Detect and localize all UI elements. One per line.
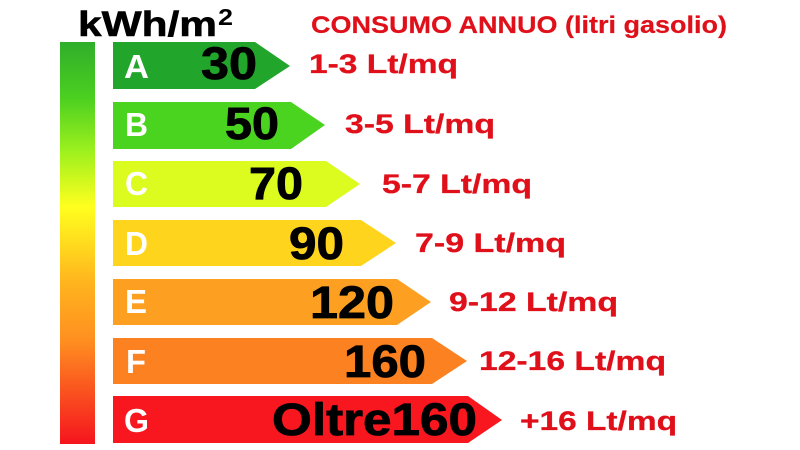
class F row: 160: [344, 336, 426, 387]
class E row: 120: [310, 277, 394, 328]
class G row: Oltre160: [272, 394, 477, 445]
unit heading: kWh/m: [78, 5, 217, 44]
class A row: A: [124, 48, 149, 85]
class G row: +16 Lt/mq: [520, 406, 677, 436]
unit heading: 2: [218, 4, 233, 30]
class F row: [113, 336, 666, 387]
class G row: [113, 394, 677, 445]
class E row: [113, 277, 618, 328]
class F row: 12-16 Lt/mq: [479, 346, 666, 376]
class B row: [113, 98, 495, 149]
class F row: F: [126, 343, 146, 380]
class E row: E: [125, 283, 147, 320]
class A row: 1-3 Lt/mq: [309, 49, 458, 79]
class C row: 70: [249, 158, 303, 209]
class B row: B: [125, 106, 148, 143]
class D row: D: [125, 225, 148, 262]
class D row: 90: [289, 218, 344, 269]
class B row: 3-5 Lt/mq: [345, 109, 495, 139]
class C row: C: [125, 165, 148, 202]
class A row: [113, 38, 458, 89]
class D row: [113, 218, 566, 269]
class B row: 50: [225, 98, 279, 149]
class E row: 9-12 Lt/mq: [449, 287, 618, 317]
class D row: 7-9 Lt/mq: [415, 228, 566, 258]
vertical gradient scale bar: [60, 42, 95, 444]
class A row: 30: [201, 38, 257, 89]
class C row: [113, 158, 532, 209]
class C row: 5-7 Lt/mq: [382, 169, 532, 199]
class G row: G: [124, 402, 149, 439]
annual consumption heading: CONSUMO ANNUO (litri gasolio): [311, 12, 727, 39]
